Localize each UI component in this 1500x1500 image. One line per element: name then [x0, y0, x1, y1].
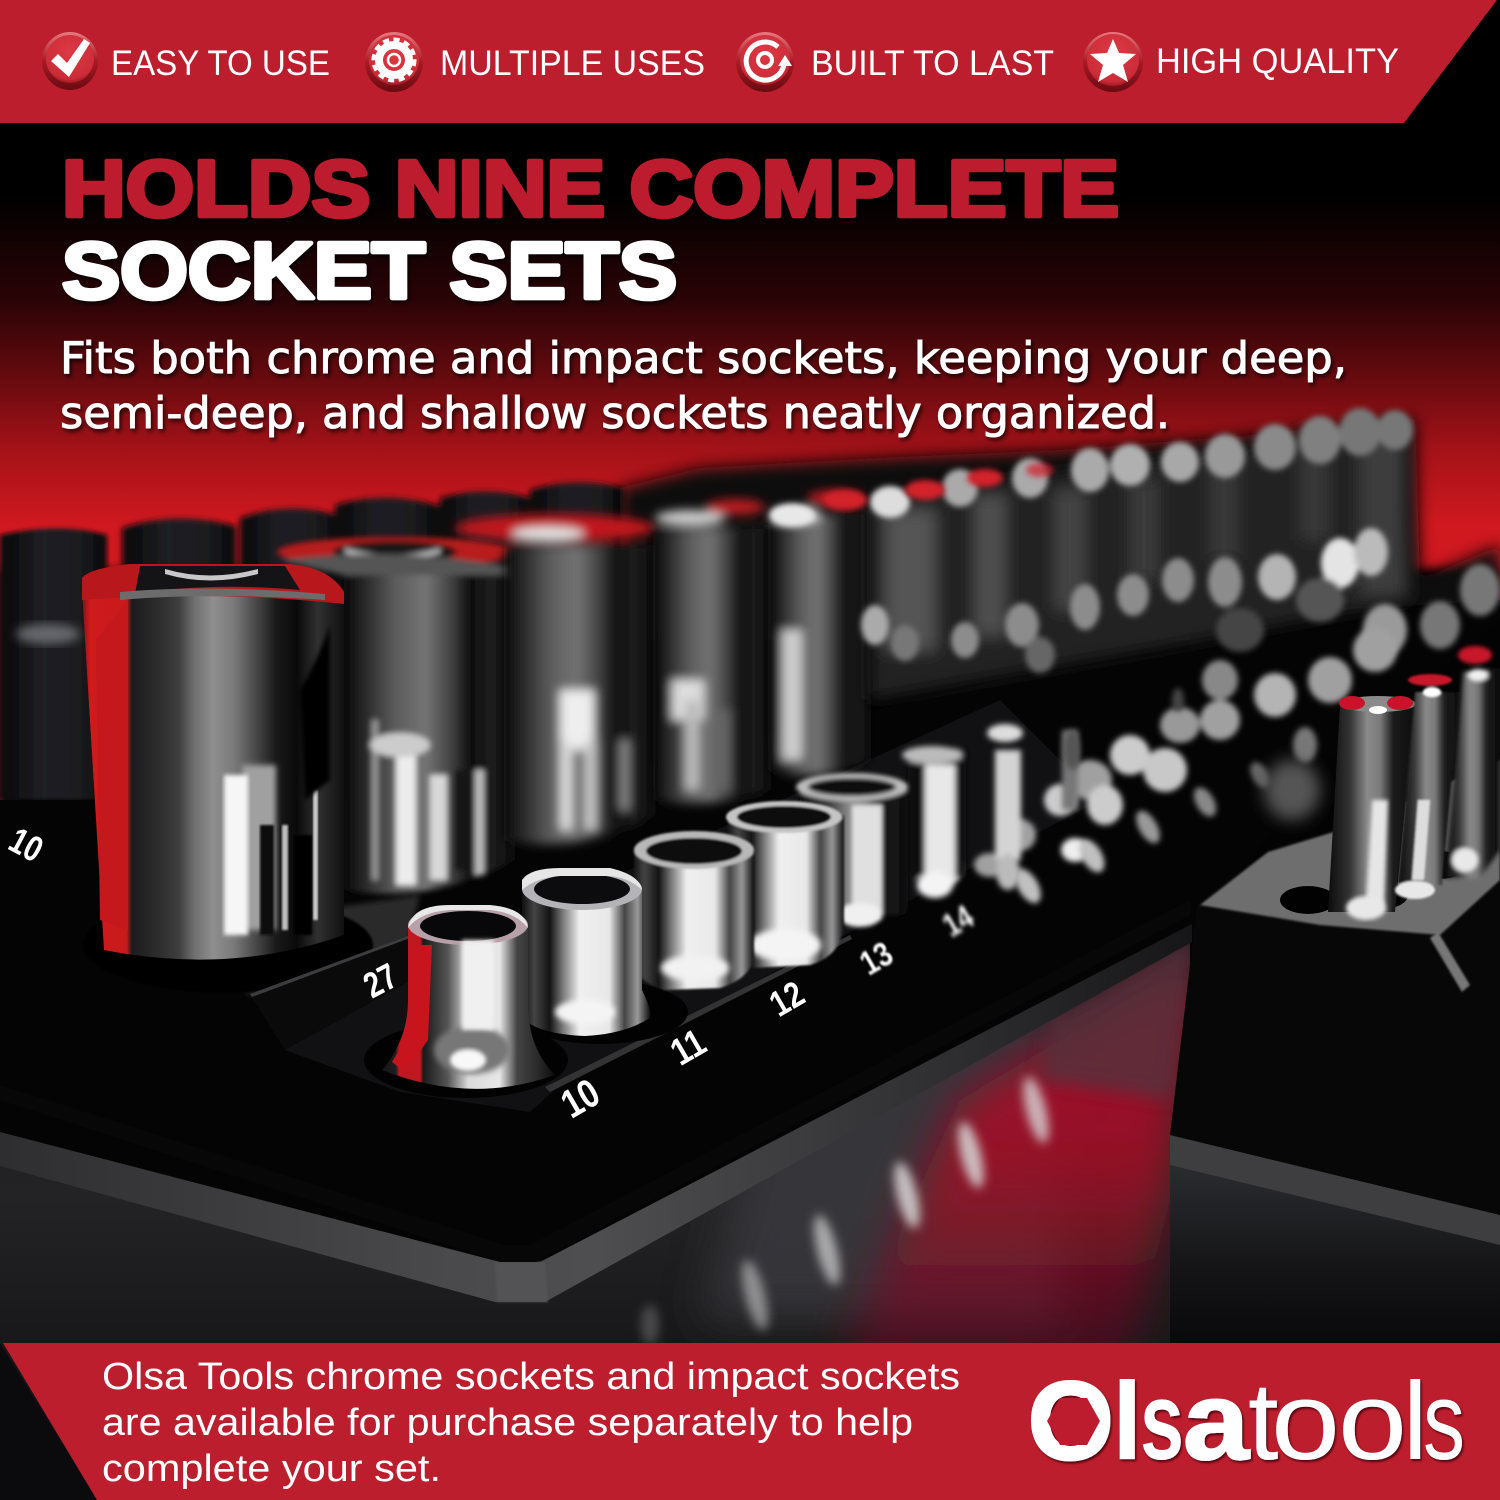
label: easy to use: EASY TO USE: [111, 44, 330, 83]
table reflections: [641, 1075, 1054, 1345]
front row chrome socket 13: [726, 801, 844, 968]
tray number labels: 27: [356, 955, 404, 1006]
logo: Olsatools: s: [1140, 1360, 1184, 1483]
logo: Olsatools: O: [1028, 1360, 1114, 1483]
footer note: complete your set.: [102, 1448, 441, 1490]
logo: Olsatools: [1028, 1360, 1465, 1483]
footer note: [102, 1356, 960, 1490]
tray number labels: 11: [664, 1022, 713, 1074]
icon: star badge: [1083, 32, 1143, 92]
logo: Olsatools: o: [1338, 1360, 1407, 1483]
background impact sockets row: [0, 418, 1500, 890]
subheading: semi-deep, and shallow sockets neatly organized.: [60, 388, 1170, 439]
logo: Olsatools: o: [1271, 1360, 1340, 1483]
mid-row blurred chrome sockets: [277, 537, 515, 894]
front row chrome socket 14: [796, 773, 908, 927]
label: high quality: HIGH QUALITY: [1156, 42, 1399, 81]
label: multiple uses: MULTIPLE USES: [440, 44, 705, 83]
tray: main black body: [0, 600, 1500, 1302]
tray number labels: 12: [762, 973, 811, 1024]
tray number labels: [3, 819, 1500, 1127]
logo: Olsatools: l: [1112, 1360, 1143, 1483]
logo: Olsatools: s: [1423, 1360, 1465, 1483]
footer note: are available for purchase separately to help: [102, 1402, 913, 1444]
bokeh highlights along second band: [861, 528, 1500, 673]
blurred tray numbers far down the row: [1010, 688, 1317, 907]
table surface: [0, 900, 1500, 1500]
headline: SOCKET SETS: [62, 226, 677, 315]
small tray socket three: [1445, 646, 1500, 878]
bokeh highlights along front band: [938, 628, 1397, 882]
logo: Olsatools: t: [1248, 1360, 1279, 1483]
icon: gear badge: [365, 32, 423, 92]
icon: check mark badge: [42, 32, 98, 90]
headline: [62, 144, 1119, 315]
small tray socket one: [1328, 696, 1416, 920]
footer banner: [0, 1343, 1500, 1500]
front row chrome socket 11: [521, 868, 650, 1036]
bokeh highlights along top rims: [770, 408, 1413, 526]
large front chrome socket: [82, 564, 344, 960]
subheading: [60, 333, 1347, 439]
icon: recycle gear badge: [736, 32, 794, 92]
blurred short sockets on near row: [902, 724, 1078, 898]
footer note: Olsa Tools chrome sockets and impact sockets: [102, 1356, 960, 1398]
tray number labels: 10: [553, 1070, 607, 1127]
far chrome sockets out of focus: [770, 408, 1500, 907]
headline: HOLDS NINE COMPLETE: [62, 144, 1119, 233]
front row chrome socket 12: [632, 831, 754, 990]
photo: socket organizer trays on a reflective table: [0, 408, 1500, 1500]
header banner: [0, 0, 1497, 123]
small tray socket two: [1395, 674, 1460, 899]
tray number labels: 14: [937, 899, 981, 944]
subheading: Fits both chrome and impact sockets, keeping your deep,: [60, 333, 1347, 384]
label: built to last: BUILT TO LAST: [811, 44, 1054, 83]
logo: Olsatools: a: [1183, 1360, 1250, 1483]
tray number labels: 13: [853, 934, 899, 983]
logo: Olsatools: l: [1403, 1360, 1427, 1483]
small tray at right: [1170, 646, 1500, 1245]
tray top plate around large socket: [83, 895, 420, 1050]
tray number labels: 10: [3, 819, 50, 870]
front row chrome socket 10: [382, 905, 555, 1089]
tray top plate along front row: [285, 700, 1100, 1112]
